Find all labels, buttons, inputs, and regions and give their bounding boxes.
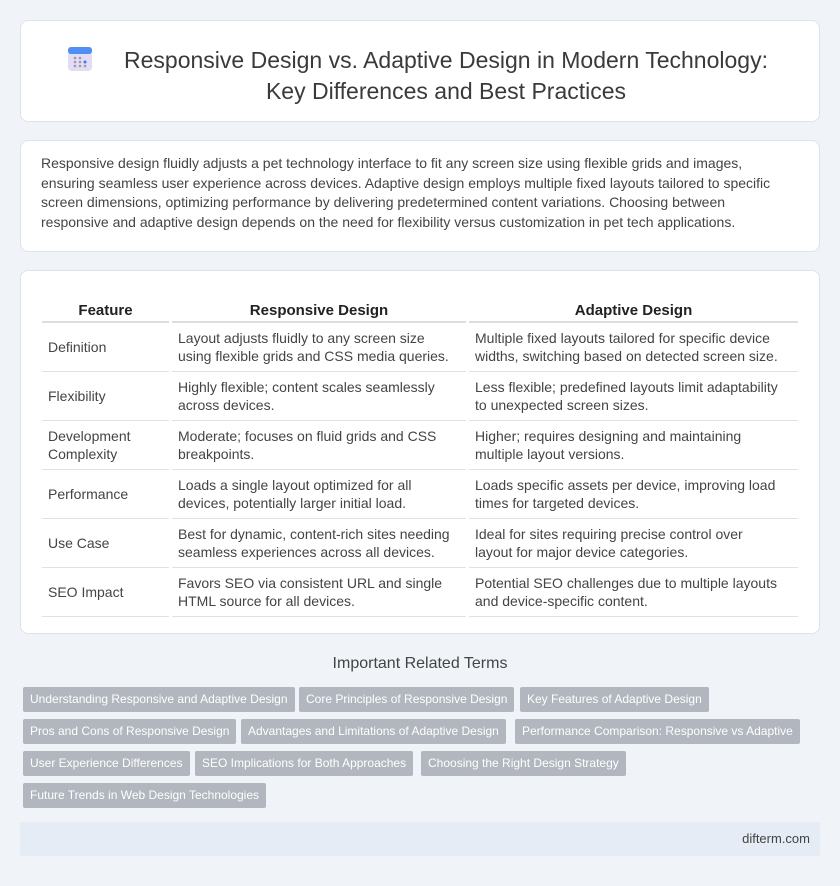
comparison table panel: Higher; requires designing and maintaining multiple layout versions. bbox=[475, 428, 741, 462]
related terms tags: Performance Comparison: Responsive vs Adaptive bbox=[522, 724, 793, 738]
comparison table panel: Multiple fixed layouts tailored for specific device widths, switching based on detected screen size. bbox=[475, 330, 778, 364]
related terms tags: Advantages and Limitations of Adaptive Design bbox=[248, 724, 499, 738]
comparison table panel: Ideal for sites requiring precise control over bbox=[475, 526, 743, 542]
comparison table panel: Loads a single layout optimized for all devices, potentially larger initial load. bbox=[178, 477, 411, 511]
comparison table panel: Potential SEO challenges due to multiple layouts and device-specific content. bbox=[475, 575, 777, 609]
related terms tags: Future Trends in Web Design Technologies bbox=[30, 788, 259, 802]
related terms heading: Important Related Terms bbox=[333, 655, 507, 672]
comparison table panel: SEO Impact bbox=[48, 584, 123, 600]
related terms tags: Core Principles of Responsive Design bbox=[306, 692, 507, 706]
icon: calendar bbox=[68, 47, 92, 71]
related terms tags: SEO Implications for Both Approaches bbox=[202, 756, 406, 770]
comparison table panel: layout for major device categories. bbox=[475, 544, 688, 560]
comparison table panel: Development Complexity bbox=[48, 428, 130, 462]
footer bbox=[20, 822, 820, 856]
comparison table panel: Loads specific assets per device, improving load times for targeted devices. bbox=[475, 477, 775, 511]
comparison table panel: Flexibility bbox=[48, 388, 106, 404]
comparison table panel: Adaptive Design bbox=[575, 302, 692, 319]
intro text bbox=[20, 140, 820, 252]
comparison table panel: Moderate; focuses on fluid grids and CSS breakpoints. bbox=[178, 428, 436, 462]
related terms tags: Key Features of Adaptive Design bbox=[527, 692, 702, 706]
title: Responsive Design vs. Adaptive Design in Modern Technology: bbox=[124, 47, 768, 73]
comparison table panel: Best for dynamic, content-rich sites needing seamless experiences across all devices. bbox=[178, 526, 450, 560]
comparison table panel: Definition bbox=[48, 339, 106, 355]
comparison table panel: Less flexible; predefined layouts limit adaptability to unexpected screen sizes. bbox=[475, 379, 778, 413]
related terms tags: Choosing the Right Design Strategy bbox=[428, 756, 619, 770]
comparison table panel: Performance bbox=[48, 486, 128, 502]
intro text: Responsive design fluidly adjusts a pet technology interface to fit any screen size using flexible grids and images, ensuring seamless user experience across devices. Adaptive design employs multiple fixed layouts tailored to specific screen dimensions, optimizing performance by delivering predetermined content variations. Choosing between responsive and adaptive design depends on the need for flexibility versus customization in pet tech applications. bbox=[41, 155, 770, 230]
comparison table panel: Responsive Design bbox=[250, 302, 388, 319]
header card bbox=[20, 20, 820, 122]
title: Key Differences and Best Practices bbox=[266, 78, 626, 104]
title bbox=[124, 47, 768, 104]
related terms tags: Pros and Cons of Responsive Design bbox=[30, 724, 229, 738]
comparison table panel: Feature bbox=[78, 302, 133, 319]
footer: difterm.com bbox=[742, 831, 810, 846]
comparison table panel: Use Case bbox=[48, 535, 109, 551]
related terms tags: User Experience Differences bbox=[30, 756, 183, 770]
comparison table panel bbox=[20, 270, 820, 634]
comparison table panel: Favors SEO via consistent URL and single HTML source for all devices. bbox=[178, 575, 442, 609]
comparison table panel: Layout adjusts fluidly to any screen size using flexible grids and CSS media queries. bbox=[178, 330, 449, 364]
comparison table panel: Highly flexible; content scales seamlessly across devices. bbox=[178, 379, 435, 413]
related terms tags: Understanding Responsive and Adaptive Design bbox=[30, 692, 288, 706]
